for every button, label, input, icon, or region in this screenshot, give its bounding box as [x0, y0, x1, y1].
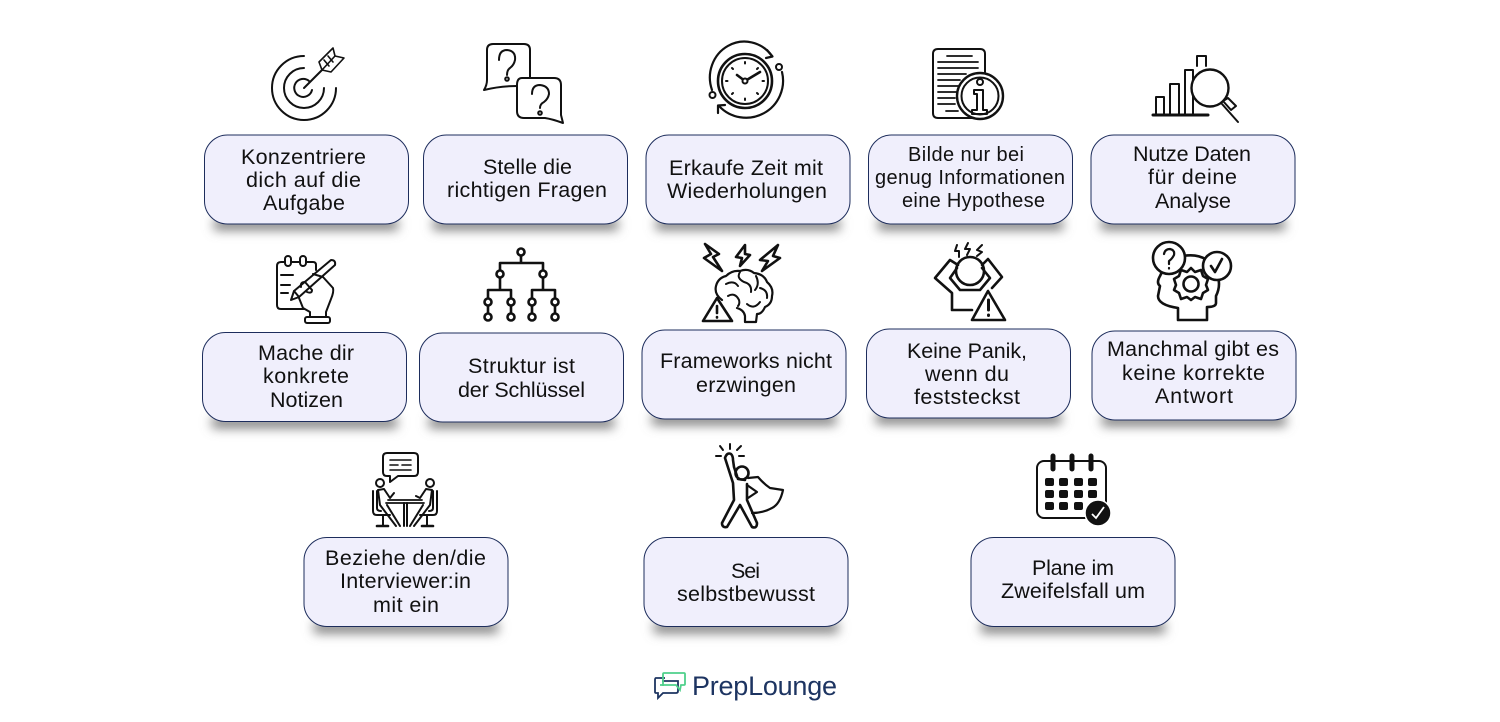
card: Konzentriere dich auf die Aufgabe: [204, 135, 408, 230]
card: Frameworks nicht erzwingen: [642, 330, 846, 425]
card: Plane im Zweifelsfall um: Zweifelsfall um: [1001, 579, 1145, 603]
card: Frameworks nicht erzwingen: erzwingen: [696, 373, 796, 397]
icon: interview at table: [373, 453, 437, 526]
card: Mache dir konkrete Notizen: Mache dir: [258, 341, 354, 365]
card: Plane im Zweifelsfall um: Plane im: [1032, 556, 1114, 580]
card: Manchmal gibt es keine korrekte Antwort: Antwort: [1155, 384, 1233, 408]
card: Beziehe den/die Interviewer:in mit ein: Beziehe den/die: [325, 546, 486, 570]
card: Konzentriere dich auf die Aufgabe: Aufgabe: [263, 191, 345, 215]
icon: confident person with cape: [716, 444, 783, 528]
card: Stelle die richtigen Fragen: Stelle die: [483, 155, 572, 179]
card: Sei selbstbewusst: [644, 538, 848, 633]
logo: PrepLounge: PrepLounge: [692, 671, 837, 701]
icon: hierarchy tree: [484, 248, 558, 320]
card: Manchmal gibt es keine korrekte Antwort: Manchmal gibt es: [1107, 337, 1279, 361]
card: Mache dir konkrete Notizen: konkrete: [263, 364, 349, 388]
card: Keine Panik, wenn du feststeckst: wenn du: [924, 362, 1009, 386]
card: Stelle die richtigen Fragen: [424, 135, 628, 230]
card: Keine Panik, wenn du feststeckst: Keine Panik,: [907, 339, 1027, 363]
card: Struktur ist der Schlüssel: der Schlüssel: [458, 378, 585, 402]
card: Beziehe den/die Interviewer:in mit ein: Interviewer:in: [340, 569, 471, 593]
card: Mache dir konkrete Notizen: [202, 332, 406, 428]
icon: head with gear, question and check: [1153, 242, 1231, 320]
card: Nutze Daten für deine Analyse: Nutze Daten: [1133, 142, 1251, 166]
card: Nutze Daten für deine Analyse: für deine: [1148, 165, 1237, 189]
card: Stelle die richtigen Fragen: richtigen Fragen: [447, 178, 607, 202]
card: Beziehe den/die Interviewer:in mit ein: mit ein: [373, 593, 439, 617]
card: Mache dir konkrete Notizen: Notizen: [270, 388, 343, 412]
icon: target with arrow: [272, 48, 344, 120]
icon: brain with lightning and warning: [703, 244, 780, 322]
icon: notepad with writing hand: [277, 256, 335, 323]
icon: bar chart with magnifier: [1153, 56, 1238, 122]
card: Konzentriere dich auf die Aufgabe: Konzentriere: [241, 145, 366, 169]
card: Konzentriere dich auf die Aufgabe: dich auf die: [246, 168, 361, 192]
card: Struktur ist der Schlüssel: [420, 333, 624, 428]
card: Nutze Daten für deine Analyse: Analyse: [1155, 189, 1231, 213]
card: Bilde nur bei genug Informationen eine Hypothese: Bilde nur bei: [908, 144, 1024, 166]
card: Nutze Daten für deine Analyse: [1091, 135, 1295, 230]
card: Manchmal gibt es keine korrekte Antwort: [1092, 331, 1296, 426]
card: Keine Panik, wenn du feststeckst: feststeckst: [914, 385, 1020, 409]
card: Erkaufe Zeit mit Wiederholungen: Wiederholungen: [667, 179, 827, 203]
card: Keine Panik, wenn du feststeckst: [866, 329, 1070, 424]
card: Bilde nur bei genug Informationen eine Hypothese: genug Informationen: [875, 167, 1065, 189]
icon: calendar with check badge: [1037, 456, 1111, 526]
card: Erkaufe Zeit mit Wiederholungen: Erkaufe Zeit mit: [669, 156, 823, 180]
icon: document with info badge: [933, 49, 1003, 119]
card: Manchmal gibt es keine korrekte Antwort: keine korrekte: [1122, 361, 1265, 385]
card: Bilde nur bei genug Informationen eine Hypothese: eine Hypothese: [902, 190, 1045, 212]
icon: clock with circular arrows: [710, 42, 783, 118]
card: Struktur ist der Schlüssel: Struktur ist: [468, 354, 575, 378]
icon: question speech bubbles: [484, 44, 563, 123]
card: Plane im Zweifelsfall um: [971, 538, 1175, 633]
card: Frameworks nicht erzwingen: Frameworks nicht: [660, 349, 832, 373]
card: Erkaufe Zeit mit Wiederholungen: [646, 135, 850, 230]
card: Sei selbstbewusst: Sei: [731, 559, 760, 583]
card: Sei selbstbewusst: selbstbewusst: [677, 582, 815, 606]
card: Bilde nur bei genug Informationen eine Hypothese: [868, 135, 1072, 230]
card: Beziehe den/die Interviewer:in mit ein: [304, 538, 508, 633]
icon: panicking person with warning: [935, 243, 1005, 320]
